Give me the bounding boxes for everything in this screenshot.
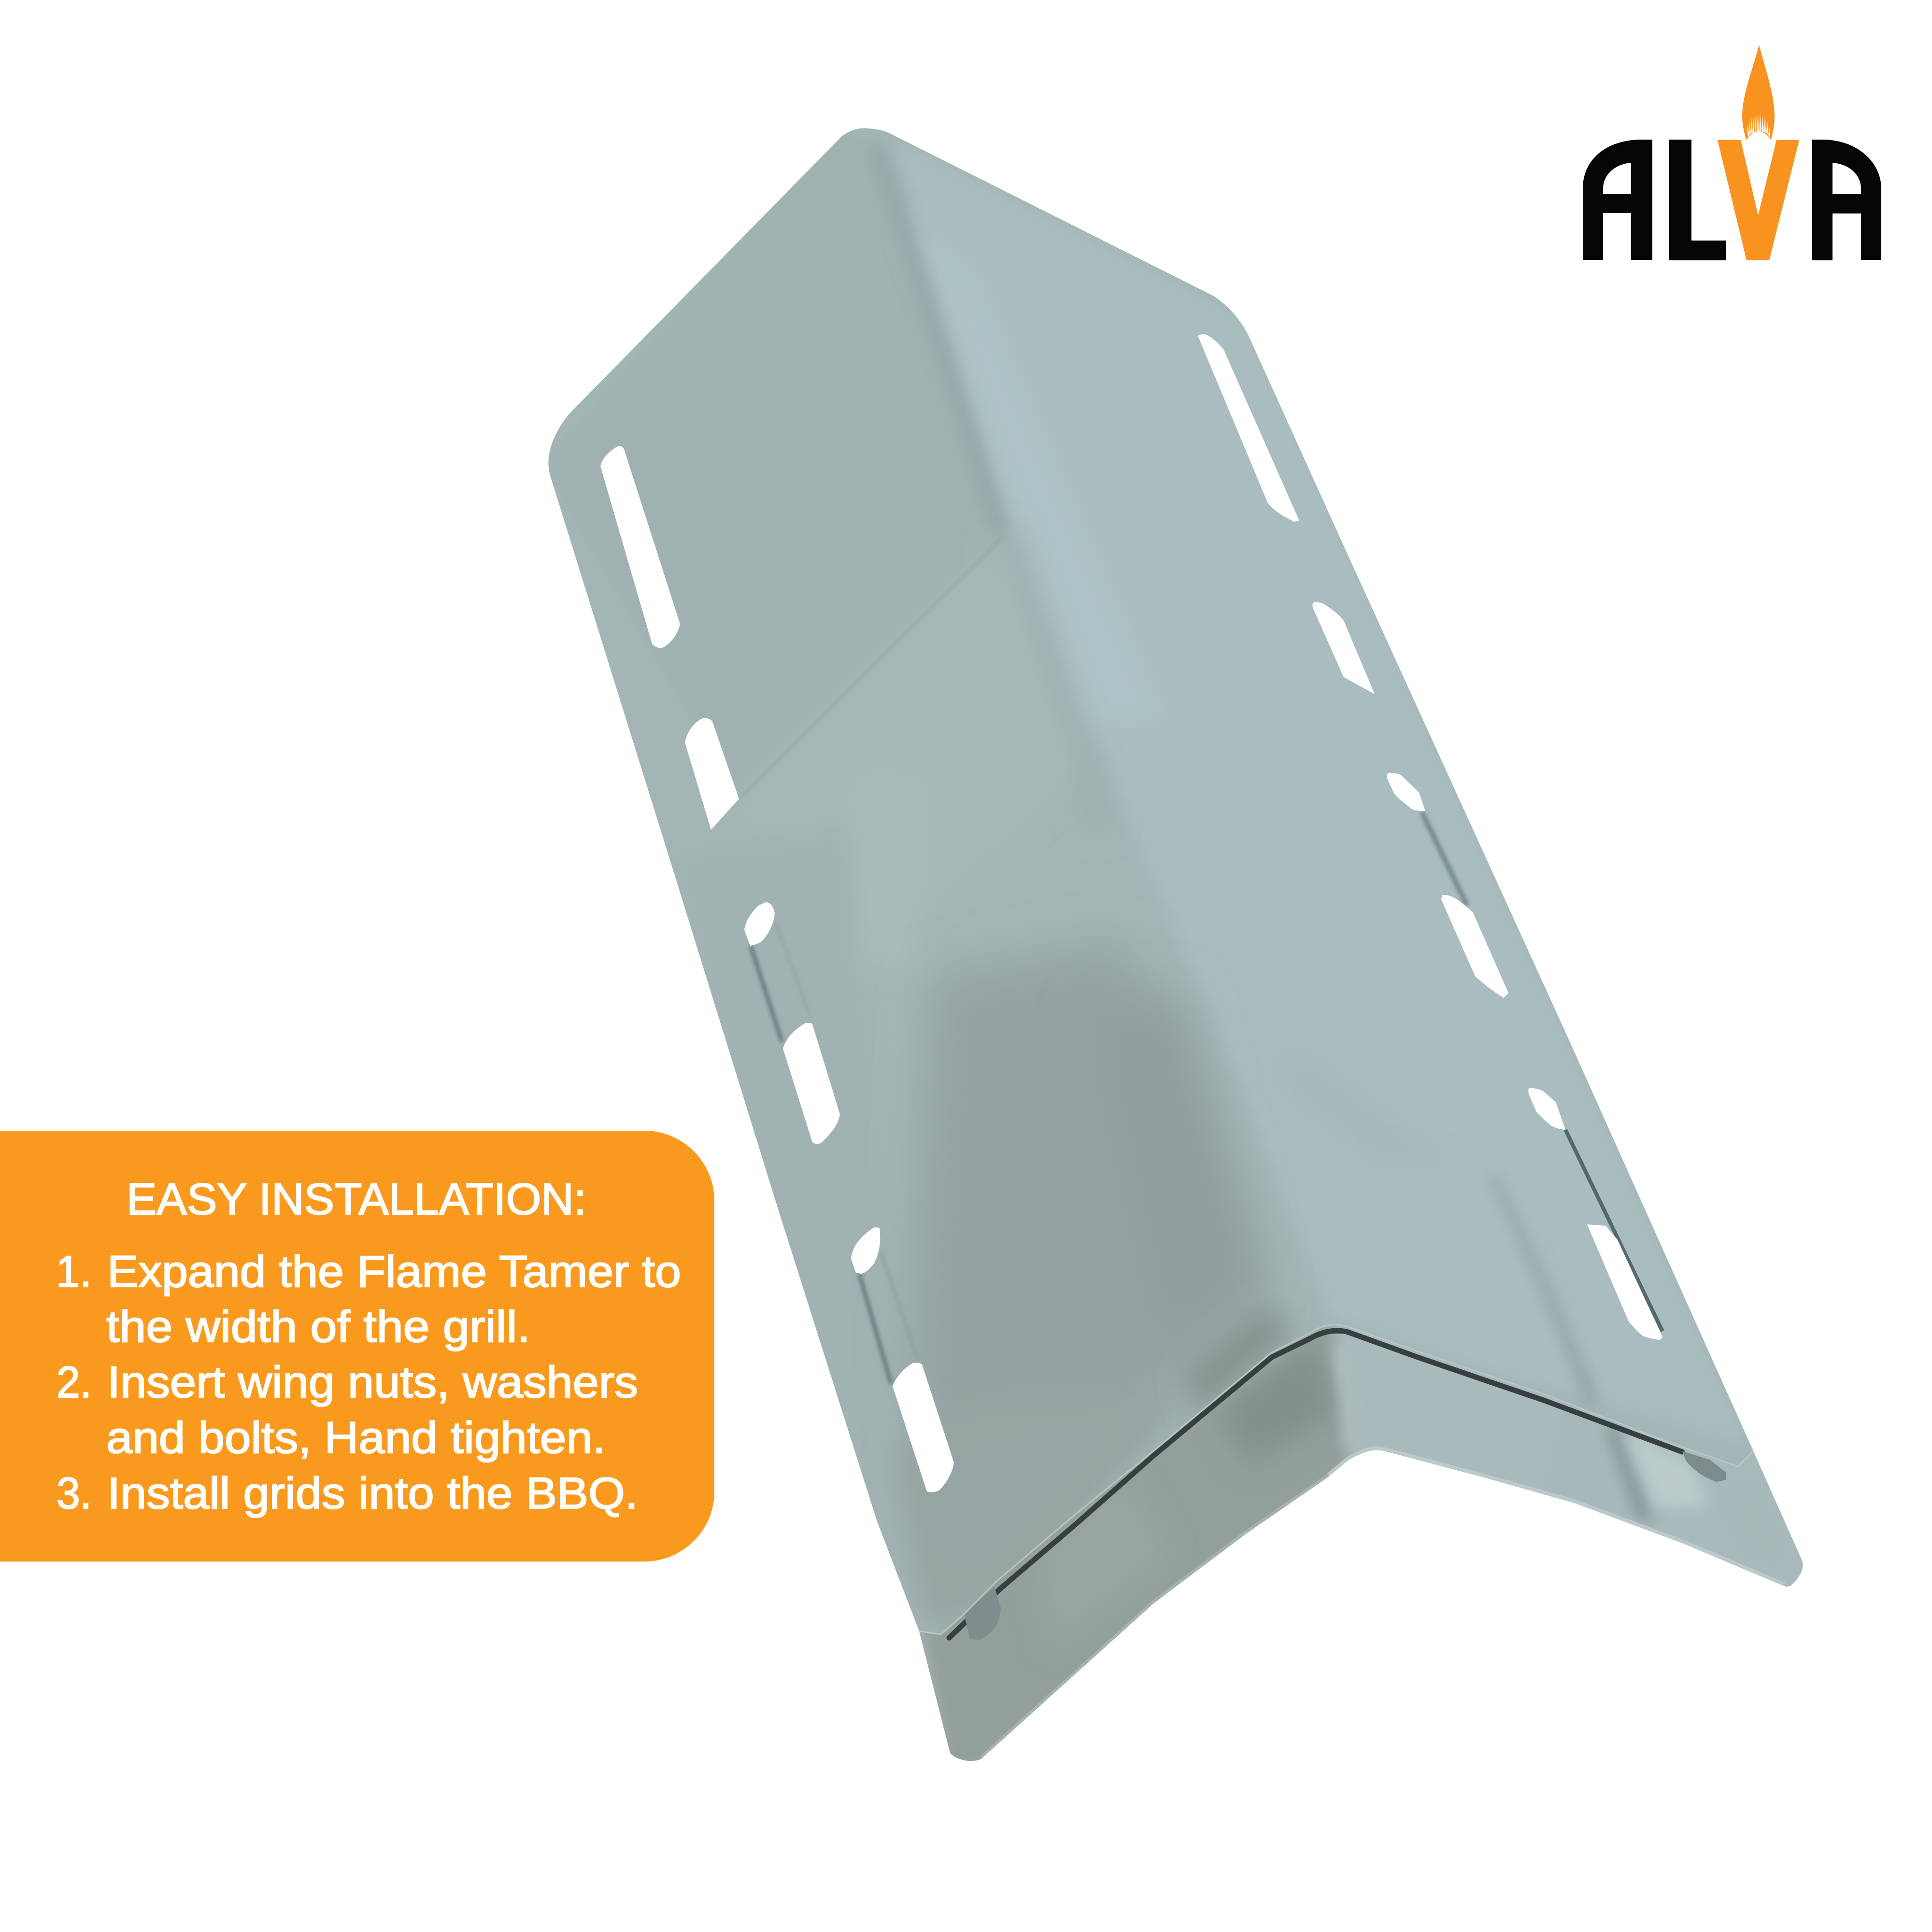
- slot creases: [751, 812, 1662, 1384]
- slot: left 3 upper: [744, 902, 775, 946]
- panel heading: EASY INSTALLATION:: [127, 1175, 586, 1224]
- bright reflection patch: [1623, 1435, 1705, 1509]
- slot: left 2: [685, 718, 739, 830]
- panel: easy installation: [0, 1131, 714, 1562]
- step 3: Install grids into the BBQ.: [107, 1469, 638, 1518]
- logo flame: [1742, 45, 1775, 142]
- step 1: Expand the Flame Tamer to: [107, 1247, 681, 1296]
- logo letter A: [1583, 140, 1652, 260]
- slot: right 3 upper: [1387, 773, 1425, 811]
- slot: right 2: [1312, 602, 1375, 694]
- lower plate bright bottom edge: [1328, 1449, 1784, 1584]
- slot: left 4 upper: [851, 1227, 880, 1274]
- left bolt tab: [964, 1587, 1001, 1640]
- logo letter V: [1718, 140, 1799, 260]
- step 2: and bolts, Hand tighten.: [106, 1413, 606, 1463]
- shading: ridge crease: [877, 147, 1002, 534]
- lower plate of flame tamer: [919, 1325, 1803, 1761]
- shading: upper left wall: [541, 130, 1002, 799]
- dark reflection band: [1605, 1424, 1654, 1521]
- panel background: [0, 1131, 714, 1562]
- slot: left 4 lower: [893, 1363, 954, 1492]
- slot: right 4 upper: [1528, 1088, 1565, 1130]
- slot: right 4 lower: [1587, 1224, 1662, 1340]
- step 2: 2.: [57, 1358, 92, 1407]
- logo letter L: [1669, 140, 1726, 260]
- upper plate of flame tamer: [531, 121, 1787, 1666]
- mounting slots: [600, 334, 1662, 1492]
- logo: ALVA: [1583, 45, 1881, 260]
- step 2: Insert wing nuts, washers: [107, 1358, 638, 1407]
- shading: lower left wall: [739, 546, 1077, 990]
- dark gap between plates: [949, 1331, 1682, 1638]
- upper plate bright lower edge: [919, 1325, 1753, 1634]
- step 1: 1.: [56, 1247, 92, 1296]
- logo letter A right: [1812, 140, 1881, 260]
- shading: right wall: [894, 140, 1748, 1444]
- flame tamer product photo: [531, 121, 1835, 1787]
- slot: right 3 lower: [1441, 895, 1508, 998]
- step 2: [57, 1358, 638, 1463]
- slot: left 1: [600, 446, 680, 648]
- step 1: the width of the grill.: [106, 1302, 530, 1351]
- slot: left 3 lower: [783, 1023, 840, 1144]
- right bolt tab: [1682, 1451, 1726, 1482]
- crease line from slot to ridge: [739, 535, 1005, 799]
- slot: right 1: [1198, 334, 1299, 522]
- shading: streaks on right wall: [1288, 1067, 1431, 1175]
- step 3: 3.: [57, 1469, 92, 1518]
- step 1: [56, 1247, 681, 1351]
